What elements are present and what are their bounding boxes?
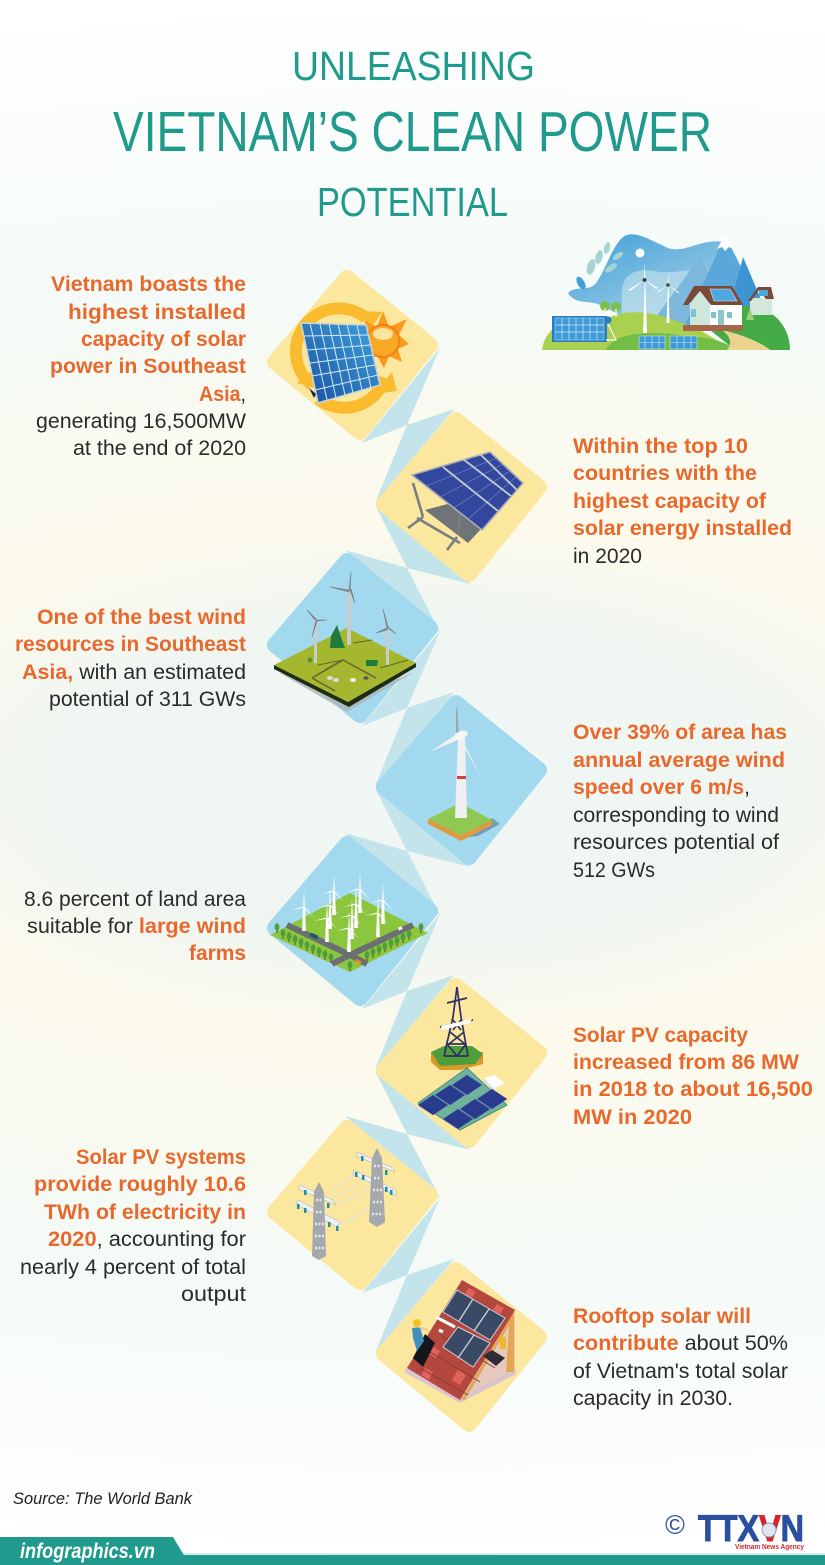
diamond 3: wind farm on grass — [274, 561, 430, 715]
text: solar capacity in Southeast Asia — [36, 272, 247, 460]
text: rooftop solar: Rooftop solar will — [573, 1304, 751, 1328]
diamond 1: solar panel and sun — [275, 278, 430, 432]
text: wind speed: 512 GWs — [573, 858, 655, 882]
text: top 10 countries: highest capacity of — [573, 489, 767, 513]
text: solar capacity in Southeast Asia: Asia, — [199, 382, 246, 406]
logo: TTXVN: TTXVN — [698, 1508, 804, 1549]
text: wind resources — [15, 605, 246, 711]
text: solar PV electricity output: output — [181, 1282, 246, 1306]
text: land for wind farms: suitable for large wind — [27, 914, 246, 938]
text: solar PV electricity output: 2020, accounting for — [48, 1227, 246, 1251]
text: wind resources: One of the best wind — [37, 605, 246, 629]
text: top 10 countries: countries with the — [573, 461, 757, 485]
text: wind speed: corresponding to wind — [573, 803, 779, 827]
footer bar — [0, 1537, 825, 1565]
text: rooftop solar: capacity in 2030. — [573, 1386, 733, 1410]
text: wind speed: resources potential of — [573, 830, 779, 854]
text: solar PV capacity growth: MW in 2020 — [573, 1105, 692, 1129]
diamond 8: rooftop solar installation — [384, 1270, 539, 1424]
title — [113, 43, 712, 225]
text: land for wind farms — [24, 887, 246, 965]
text: solar PV electricity output — [20, 1145, 246, 1306]
text: wind speed: Over 39% of area has — [573, 720, 787, 744]
text: solar PV capacity growth: increased from 86 MW — [573, 1050, 800, 1074]
diamond 4: single wind turbine — [384, 703, 539, 857]
text: solar capacity in Southeast Asia: Vietnam boasts the — [51, 272, 246, 296]
text: wind resources: potential of 311 GWs — [49, 687, 246, 711]
diamond 7: transmission towers — [275, 1128, 430, 1282]
text: wind speed — [573, 720, 787, 882]
diamond 2: mounted solar array — [384, 420, 539, 574]
text: wind speed: annual average wind — [573, 748, 785, 772]
text: solar PV electricity output: Solar PV systems — [76, 1145, 246, 1169]
text: solar capacity in Southeast Asia: at the end of 2020 — [73, 436, 246, 460]
text: top 10 countries — [573, 434, 792, 568]
diamond 5: wind farm with roads — [270, 844, 430, 998]
text: solar PV capacity growth — [573, 1023, 813, 1129]
title: POTENTIAL — [317, 179, 508, 225]
diamond 6: pylon and solar farm — [384, 986, 539, 1140]
text: solar capacity in Southeast Asia: highest installed — [68, 300, 246, 324]
title: UNLEASHING — [292, 43, 535, 89]
logo: TTXVN: Vietnam News Agency — [735, 1544, 804, 1551]
text: solar capacity in Southeast Asia: power in Southeast — [50, 354, 246, 378]
source: Source: The World Bank — [13, 1489, 193, 1508]
text: solar PV electricity output: nearly 4 percent of total — [20, 1255, 246, 1279]
text: land for wind farms: farms — [189, 941, 246, 965]
text: land for wind farms: 8.6 percent of land area — [24, 887, 246, 911]
text: solar capacity in Southeast Asia: capacity of solar — [81, 327, 247, 351]
text: top 10 countries: Within the top 10 — [573, 434, 748, 458]
text: top 10 countries: solar energy installed — [573, 516, 792, 540]
text: solar PV capacity growth: Solar PV capacity — [573, 1023, 748, 1047]
text: solar capacity in Southeast Asia: generating 16,500MW — [36, 409, 247, 433]
text: top 10 countries: in 2020 — [573, 544, 642, 568]
logo: TTXVN: © — [665, 1510, 685, 1540]
text: wind resources: Asia, with an estimated — [22, 660, 246, 684]
text: rooftop solar: contribute about 50% — [573, 1331, 788, 1355]
text: solar PV capacity growth: in 2018 to about 16,500 — [573, 1077, 813, 1101]
text: rooftop solar — [573, 1304, 788, 1410]
text: solar PV electricity output: TWh of electricity in — [44, 1200, 246, 1224]
text: wind speed: speed over 6 m/s, — [573, 775, 750, 799]
text: rooftop solar: of Vietnam's total solar — [573, 1359, 788, 1383]
footer bar: infographics.vn — [20, 1540, 155, 1563]
text: wind resources: resources in Southeast — [15, 632, 246, 656]
text: solar PV electricity output: provide roughly 10.6 — [34, 1172, 246, 1196]
illustration: renewable energy landscape — [542, 234, 790, 350]
connector ribbons — [345, 348, 470, 1353]
